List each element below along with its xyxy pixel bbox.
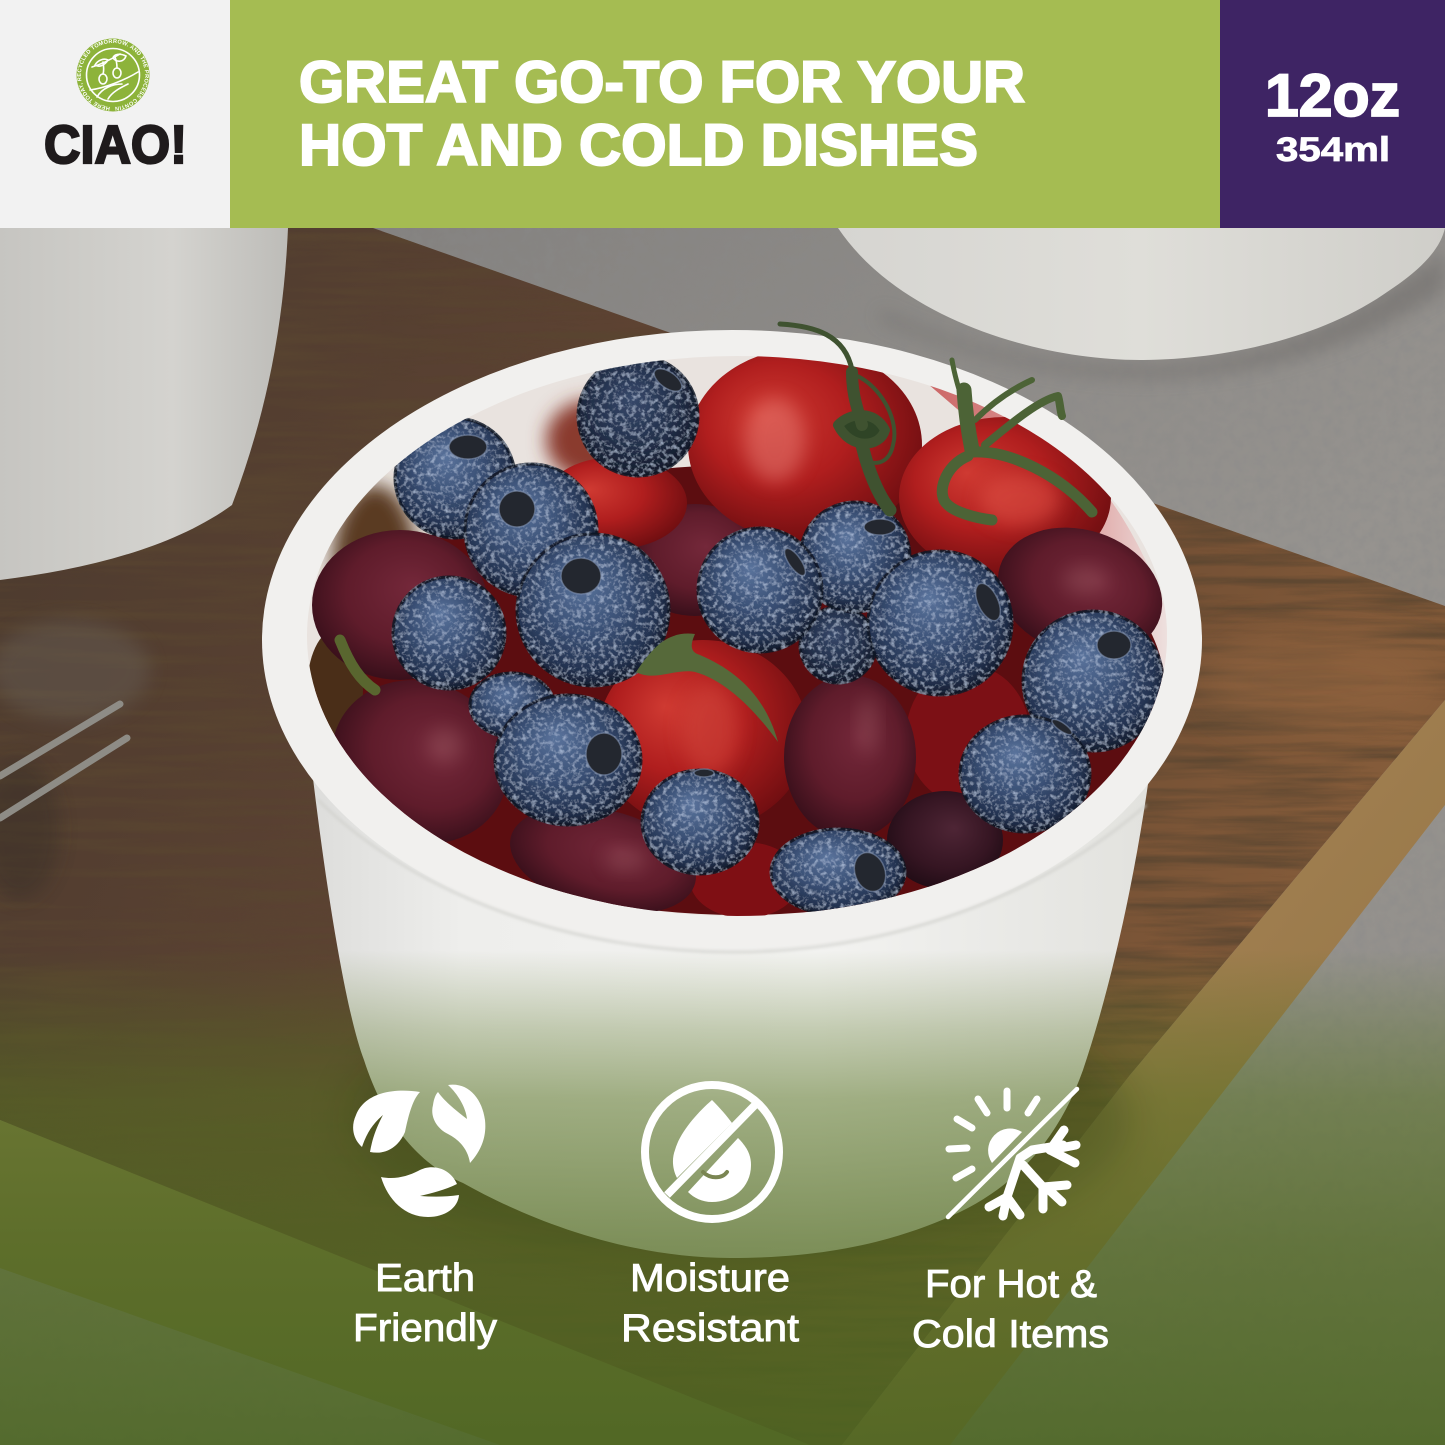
label bbox=[621, 1257, 799, 1350]
right pink wall bbox=[930, 386, 1160, 652]
blueberries bbox=[393, 356, 1163, 915]
white bowl body bbox=[312, 770, 1150, 1258]
bowl inner bbox=[300, 348, 1180, 931]
board right side face bbox=[842, 700, 1445, 1445]
grape stem at left bbox=[340, 640, 375, 690]
logo badge bbox=[76, 38, 150, 112]
board front face bbox=[0, 1120, 810, 1445]
icon: three leaves bbox=[353, 1085, 485, 1217]
back grapes bbox=[312, 504, 763, 680]
tomato stem right bbox=[942, 360, 1092, 520]
tomatoes bbox=[543, 348, 1111, 918]
reddish reflection behind berries bbox=[532, 386, 596, 472]
brand wordmark: CIAO! bbox=[44, 115, 187, 175]
label bbox=[353, 1257, 498, 1350]
title: GREAT GO-TO FOR YOUR bbox=[299, 50, 1025, 115]
header: green title panel bbox=[230, 0, 1220, 228]
label: Earth bbox=[375, 1257, 475, 1300]
label: Friendly bbox=[353, 1307, 498, 1350]
icon: sun and snowflake bbox=[948, 1089, 1077, 1217]
dark fruit backing bbox=[315, 465, 1165, 915]
label bbox=[912, 1263, 1109, 1356]
blurred cup top left bbox=[0, 228, 288, 580]
green gradient overlay bbox=[0, 950, 1445, 1445]
label: Moisture bbox=[630, 1257, 790, 1300]
header: logo panel bbox=[0, 0, 230, 228]
rim lower shadow line bbox=[318, 800, 1146, 952]
tomato stem left bbox=[780, 324, 894, 510]
size ml: 354ml bbox=[1276, 131, 1390, 169]
feature: for hot and cold items bbox=[912, 1089, 1109, 1356]
title: HOT AND COLD DISHES bbox=[299, 113, 978, 178]
bowl shadow bbox=[350, 980, 1130, 1260]
header: purple size panel bbox=[1220, 0, 1445, 228]
label: Cold Items bbox=[912, 1313, 1109, 1356]
title bbox=[299, 50, 1025, 178]
bowl rim bbox=[262, 330, 1202, 950]
grape highlights bbox=[427, 727, 463, 763]
size oz: 12oz bbox=[1265, 62, 1400, 129]
feature: earth friendly bbox=[353, 1085, 498, 1350]
feature: moisture resistant bbox=[621, 1085, 799, 1350]
label: For Hot & bbox=[925, 1263, 1097, 1306]
front grapes bbox=[334, 528, 1162, 911]
icon: crossed-out water drop bbox=[645, 1085, 779, 1219]
brown shaded wall at left bbox=[318, 473, 429, 576]
green leaf on centre tomato bbox=[636, 634, 778, 742]
label: Resistant bbox=[621, 1307, 799, 1350]
blueberry calyx holes bbox=[449, 364, 1131, 896]
tomato highlights bbox=[745, 398, 805, 482]
fork bbox=[0, 704, 127, 818]
blurred cup top right bbox=[838, 228, 1445, 378]
badge olive branch and field bbox=[90, 54, 138, 99]
